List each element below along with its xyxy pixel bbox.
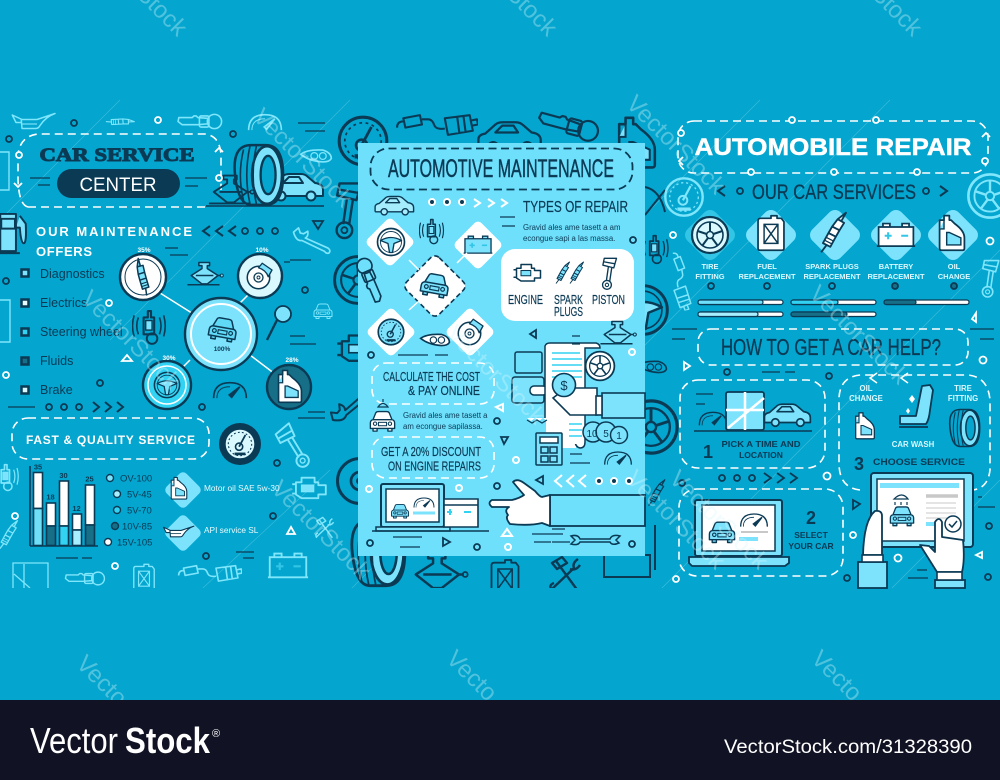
icon: paying hand with coin: $ <box>560 378 568 393</box>
service labels: OIL <box>948 262 961 271</box>
chart connector lines <box>160 293 275 374</box>
footer logo <box>30 720 220 761</box>
watermark: vectorstock text: Vecto <box>71 650 132 712</box>
fast and quality service box <box>12 418 209 459</box>
icon: tire jack car <box>206 145 324 206</box>
chart legend: 15V-105 <box>117 538 152 548</box>
repair types card: PISTON <box>592 292 625 307</box>
service icon: tire <box>682 207 738 263</box>
chart legend: 5V-45 <box>127 490 152 500</box>
tablet with hands <box>858 473 973 588</box>
chart legend: 10V-85 <box>122 522 152 532</box>
step 3 box: FITTING <box>948 394 978 403</box>
watermark: vectorstock text <box>71 0 928 712</box>
icon: wallet and card <box>512 352 547 403</box>
title dashed frame <box>18 134 221 207</box>
footer logo: ® <box>212 728 220 740</box>
footer logo: Vector <box>30 720 118 761</box>
watermark: vectorstock text: VectorStock <box>664 465 774 576</box>
heading: types of repair: TYPES OF REPAIR <box>523 199 628 216</box>
repair types card: PLUGS <box>554 304 583 319</box>
calculate box: & PAY ONLINE <box>408 384 480 398</box>
icon: battery <box>372 499 489 531</box>
decorative dots arrows <box>670 117 994 582</box>
paragraph <box>403 411 488 431</box>
title dashed frame <box>678 121 988 173</box>
list of offers: Fluids <box>40 354 73 368</box>
footer bar <box>0 700 1000 780</box>
step 2 box: YOUR CAR <box>788 541 834 551</box>
fast and quality service box: FAST & QUALITY SERVICE <box>26 433 195 447</box>
chart legend: OV-100 <box>120 474 152 484</box>
icon: magnifier <box>267 306 291 340</box>
light line icons behind the right panel <box>665 174 1000 312</box>
paragraph: econgue sapi a las massa. <box>523 234 615 243</box>
left panel light marks <box>3 117 295 569</box>
heading: our car services: OUR CAR SERVICES <box>752 181 916 204</box>
service icon: spark plug <box>807 207 863 263</box>
paragraph: Gravid ales ame tasett a <box>403 411 488 420</box>
step 2 box <box>679 489 843 576</box>
step 3 box: CHOOSE SERVICE <box>873 457 965 467</box>
repair types card: SPARK <box>554 292 583 307</box>
diamond: battery <box>453 220 503 270</box>
how to get a car help box <box>698 329 968 365</box>
paragraph <box>523 223 621 243</box>
center pill <box>57 169 180 198</box>
circle: steering 30%: 30% <box>162 355 176 362</box>
icon: fuel pump <box>0 214 26 253</box>
service labels: REPLACEMENT <box>803 272 861 281</box>
step 2 box: SELECT <box>794 530 829 540</box>
calculate box <box>372 363 494 404</box>
heading: car service: CAR SERVICE <box>40 146 194 166</box>
heading: our maintenance offers: OUR MAINTENANCE <box>36 224 192 239</box>
progress bars <box>698 300 969 316</box>
service icon: battery <box>868 207 924 263</box>
decorative dots arrows <box>366 199 635 550</box>
circle: brake 10%: 10% <box>255 247 269 254</box>
bar chart: 25 <box>85 474 94 484</box>
panel background <box>358 143 645 556</box>
service labels: SPARK PLUGS <box>805 262 859 271</box>
center pill: CENTER <box>80 175 156 196</box>
icon: coins: 1 <box>616 431 622 442</box>
calculate box: CALCULATE THE COST <box>383 370 480 384</box>
service labels: REPLACEMENT <box>867 272 925 281</box>
discount box: GET A 20% DISCOUNT <box>381 445 481 459</box>
step 3 box: TIRE <box>954 384 972 393</box>
heading line two: OFFERS <box>36 244 92 259</box>
icon: coins: 10 <box>586 429 598 440</box>
left panel decorative marks <box>3 120 325 559</box>
icon: paying hand with coin <box>552 374 645 418</box>
icon: key <box>355 256 386 304</box>
bar chart: 35 <box>34 462 42 472</box>
chart legend <box>104 474 152 548</box>
footer image id: VectorStock.com/31328390 <box>724 736 972 758</box>
service labels <box>695 262 970 281</box>
watermark: vectorstock text: VectorStock <box>441 320 551 431</box>
icon: remote <box>133 311 165 344</box>
discount box: ON ENGINE REPAIRS <box>388 460 481 474</box>
step 3 box: OIL <box>860 384 873 393</box>
icon: car <box>375 196 414 215</box>
service icon: fuel <box>743 207 799 263</box>
bar chart <box>30 462 98 546</box>
api service item: API service SL <box>204 525 259 535</box>
step 2 box: 2 <box>806 508 816 528</box>
title <box>370 148 632 190</box>
circle: brake 10% <box>238 247 282 298</box>
icon: jack <box>187 263 223 285</box>
discount box <box>372 437 494 478</box>
service labels: REPLACEMENT <box>738 272 796 281</box>
bar chart: 18 <box>46 492 55 502</box>
service labels: TIRE <box>701 262 719 271</box>
service icon: oil <box>925 207 981 263</box>
list of offers: Brake <box>40 383 73 397</box>
watermark: vectorstock text: Vecto <box>441 645 502 707</box>
icon: receipt <box>527 343 600 448</box>
title: AUTOMOTIVE MAINTENANCE <box>388 155 614 183</box>
list of offers: Diagnostics <box>40 267 105 281</box>
step 1 box: PICK A TIME AND <box>722 439 800 449</box>
diamond: brake <box>445 307 495 357</box>
light line icons behind the left panel <box>0 109 334 592</box>
icon: coins <box>583 422 628 444</box>
watermark: vectorstock text: VectorStock <box>248 103 358 214</box>
icon: wrench <box>571 535 620 545</box>
icon: speedometer <box>219 423 261 465</box>
circle: oil 28% <box>267 357 311 409</box>
icon: headlight <box>421 334 449 346</box>
oil item <box>163 470 280 510</box>
service dots <box>708 283 957 289</box>
repair types card <box>501 249 634 321</box>
middle panel: automotive maintenance <box>355 143 645 556</box>
icon: pointing hand <box>490 480 645 526</box>
left panel: car service center <box>0 134 324 553</box>
api service item <box>163 513 259 553</box>
icon: gauge <box>214 383 246 398</box>
bar chart: 12 <box>72 504 81 513</box>
chart legend: 5V-70 <box>127 506 152 516</box>
circle: steering 30% <box>143 355 191 409</box>
watermark: vectorstock text: VectorStock <box>621 465 731 576</box>
footer logo: Stock <box>125 720 211 761</box>
circle: centre car 100% <box>185 298 257 370</box>
step 1 box <box>680 380 825 468</box>
watermark: vectorstock text: VectorStock <box>76 285 186 396</box>
list of offers <box>22 267 123 397</box>
paragraph: Gravid ales ame tasett a am <box>523 223 621 232</box>
service labels: BATTERY <box>879 262 913 271</box>
paragraph: am econgue sapilassa. <box>403 422 483 431</box>
list of offers: Steering wheel <box>40 325 123 339</box>
step 1 box: LOCATION <box>739 450 783 460</box>
icon: gauge <box>605 452 631 465</box>
icon: wheel <box>586 352 614 380</box>
oil item: Motor oil SAE 5w-30 <box>204 483 280 493</box>
right panel: automobile repair <box>670 117 995 588</box>
watermark: vectorstock text: VectorStock <box>266 475 376 586</box>
diamond: steering <box>365 217 415 267</box>
heading: automobile repair: AUTOMOBILE REPAIR <box>694 134 972 161</box>
step 3 box <box>839 375 990 490</box>
step 3 box: 3 <box>854 454 864 474</box>
repair types card: ENGINE <box>508 292 543 307</box>
icon: laptop <box>376 484 450 531</box>
step 1 box: 1 <box>703 442 713 462</box>
dark line icons surrounding the middle panel <box>328 108 677 596</box>
service labels: CHANGE <box>938 272 970 281</box>
list of offers: Electrics <box>40 296 87 310</box>
watermark: vectorstock text: VectorStock <box>621 90 731 201</box>
icon: coins: 5 <box>603 429 609 440</box>
step 3 box: CAR WASH <box>892 440 935 449</box>
service labels: FITTING <box>695 272 725 281</box>
icon: calculator <box>536 433 562 465</box>
icon: jack <box>600 322 636 344</box>
connector lines <box>409 253 467 310</box>
circle: centre car 100%: 100% <box>214 346 231 353</box>
circle: spark plug 35% <box>120 247 166 300</box>
step 3 box: CHANGE <box>849 394 883 403</box>
icon: remote <box>419 220 444 244</box>
circle: spark plug 35%: 35% <box>137 247 151 254</box>
icon: car wash <box>370 399 395 431</box>
service labels: FUEL <box>757 262 777 271</box>
bar chart: 30 <box>59 471 68 480</box>
diamond: gauge <box>366 307 416 357</box>
watermark: vectorstock text: VectorStock <box>804 280 914 391</box>
circle: oil 28%: 28% <box>285 357 299 364</box>
watermark: vectorstock text: Vecto <box>806 645 867 707</box>
diagonal watermark lines <box>0 100 1000 600</box>
clipping strip below the icon band <box>0 588 1000 700</box>
diamond: dashed car <box>402 253 468 319</box>
